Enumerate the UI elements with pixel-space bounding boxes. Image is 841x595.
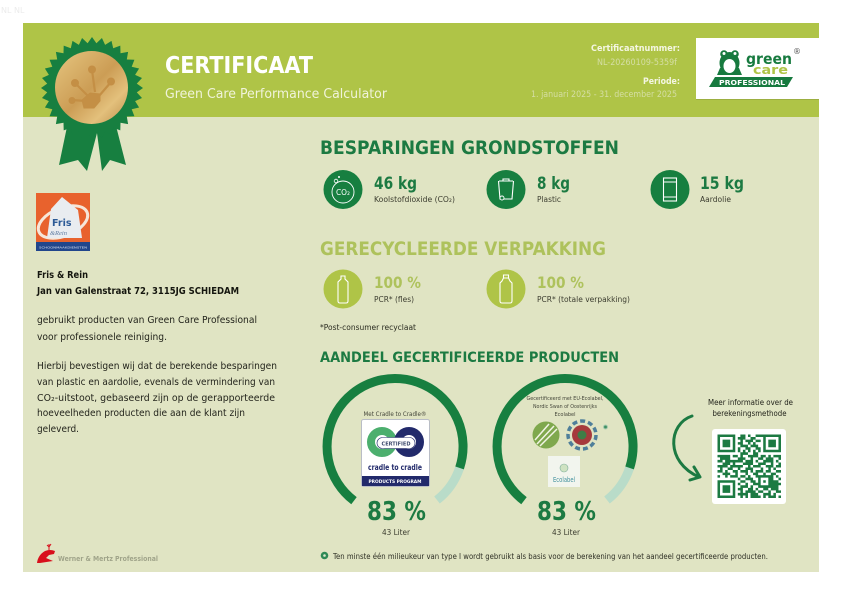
metric: CO2: 46 kg <box>374 174 417 194</box>
text block: statement: van plastic en aardolie, evenals de vermindering van <box>37 377 275 388</box>
customer logo: Fris & Rein: &Rein <box>50 230 67 237</box>
panel: header band <box>23 23 819 117</box>
chart: Cradle to Cradle gauge: 43 Liter <box>382 528 411 537</box>
chart: Cradle to Cradle gauge: Met Cradle to Cradle® <box>364 411 426 418</box>
metric: plastic <box>486 170 570 209</box>
metric: PCR bottle: PCR* (fles) <box>374 295 414 304</box>
text block: more information: Meer informatie over de <box>708 398 793 407</box>
period label: Periode: <box>643 77 680 87</box>
text block: more information: berekeningsmethode <box>712 409 787 418</box>
logo: green care professional <box>696 38 819 100</box>
chart: Cradle to Cradle gauge: cradle to cradle <box>368 463 422 472</box>
QR code <box>712 429 786 504</box>
chart: ecolabel gauge: Gecertificeerd met EU-Ecolabel, <box>526 396 604 402</box>
logo: green care professional: green <box>746 50 792 68</box>
logo: green care professional: ® <box>793 47 801 56</box>
chart: ecolabel gauge: 83 % <box>537 497 596 527</box>
text block: statement: gebruikt producten van Green Care Professional <box>37 315 257 326</box>
metric: PCR total packaging <box>486 270 630 308</box>
metric: CO2: CO₂ <box>336 188 350 197</box>
chart: Cradle to Cradle gauge <box>327 378 463 537</box>
logo: green care professional: PROFESSIONAL <box>719 79 786 87</box>
logo: green care professional: care <box>753 62 788 77</box>
text block: statement: CO₂-uitstoot, gebaseerd zijn op de gerapporteerde <box>37 393 275 404</box>
language tag: NL NL <box>1 6 25 15</box>
chart: ecolabel gauge: Ecolabel <box>554 412 576 418</box>
chart: Cradle to Cradle gauge: 83 % <box>367 497 426 527</box>
metric: PCR total packaging: 100 % <box>537 273 584 292</box>
text block: statement: hoeveelheden producten die aan de klant zijn <box>37 408 245 419</box>
text block: statement <box>37 315 277 435</box>
icon: medal rosette <box>41 37 143 171</box>
text block: statement: Hierbij bevestigen wij dat de berekende besparingen <box>37 361 277 372</box>
text block: customer address: Jan van Galenstraat 72, 3115JG SCHIEDAM <box>36 286 239 297</box>
customer logo: Fris & Rein <box>34 193 92 251</box>
chart: ecolabel gauge <box>497 378 633 537</box>
chart: ecolabel gauge: 43 Liter <box>552 528 581 537</box>
metric: crude oil: Aardolie <box>700 195 731 204</box>
footer note: Ten minste één milieukeur van type I wordt gebruikt als basis voor de berekening van het aandeel gecertificeerde producten. <box>332 552 768 561</box>
certificate number label: Certificaatnummer: <box>591 44 680 54</box>
footnote: *Post-consumer recyclaat <box>320 323 416 332</box>
chart: ecolabel gauge: Ecolabel <box>553 476 575 484</box>
customer logo: Fris & Rein: Fris <box>52 218 72 229</box>
subtitle: Green Care Performance Calculator <box>165 87 388 102</box>
chart: ecolabel gauge: Nordic Swan of Oostenrijks <box>533 404 597 410</box>
text block: more information <box>708 398 793 418</box>
heading: gerecycleerde verpakking: GERECYCLEERDE VERPAKKING <box>320 239 606 260</box>
certificate number: NL-20260109-5359f <box>597 58 678 68</box>
logo: Werner & Mertz <box>37 544 158 563</box>
text block: statement: geleverd. <box>37 424 79 435</box>
metric: PCR bottle <box>324 270 421 308</box>
chart: Cradle to Cradle gauge: PRODUCTS PROGRAM <box>368 479 422 485</box>
chart: Cradle to Cradle gauge: CERTIFIED <box>382 442 411 448</box>
heading: aandeel gecertificeerde producten: AANDEEL GECERTIFICEERDE PRODUCTEN <box>320 350 619 366</box>
metric: plastic: Plastic <box>537 195 561 204</box>
logo: Werner & Mertz: Werner & Mertz Professional <box>58 555 158 563</box>
period dates: 1. januari 2025 - 31. december 2025 <box>531 90 677 100</box>
metric: crude oil <box>650 170 744 209</box>
metric: PCR total packaging: PCR* (totale verpakking) <box>537 295 630 304</box>
customer logo: Fris & Rein: SCHOONMAAKDIENSTEN <box>39 246 87 250</box>
title: CERTIFICAAT <box>165 53 313 79</box>
text block: customer address <box>36 270 239 297</box>
arrow <box>674 416 700 480</box>
text block: customer address: Fris & Rein <box>37 270 88 281</box>
metric: CO2 <box>324 170 455 209</box>
metric: PCR bottle: 100 % <box>374 273 421 292</box>
text block: statement: voor professionele reiniging. <box>37 332 167 343</box>
heading: besparingen grondstoffen: BESPARINGEN GRONDSTOFFEN <box>320 138 619 159</box>
metric: plastic: 8 kg <box>537 174 570 194</box>
metric: CO2: Koolstofdioxide (CO₂) <box>374 195 455 204</box>
metric: crude oil: 15 kg <box>700 174 744 194</box>
